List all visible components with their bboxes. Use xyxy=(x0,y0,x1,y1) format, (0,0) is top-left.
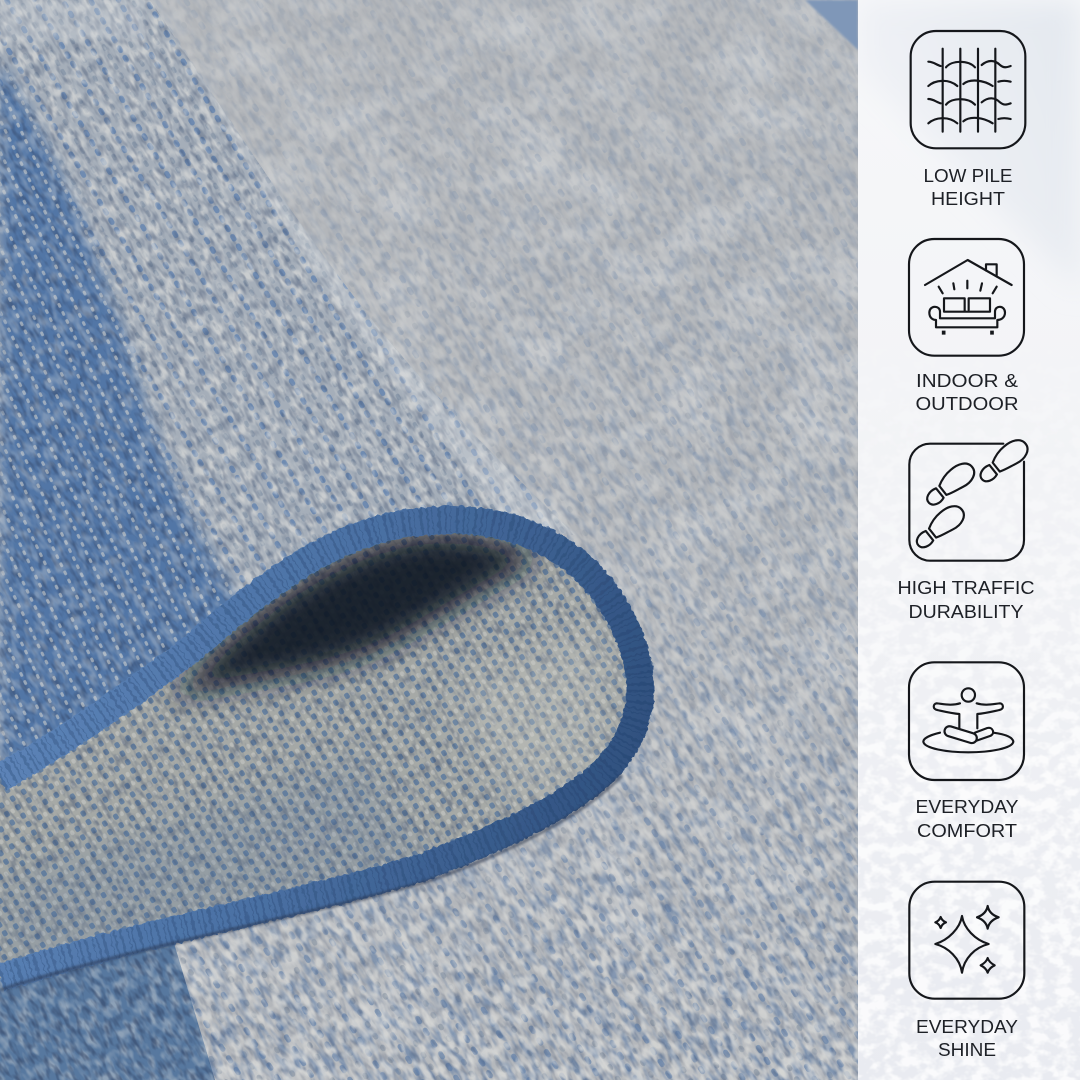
blue rug binding edge xyxy=(0,520,640,990)
icon: footprints xyxy=(909,434,1032,561)
label: everyday comfort xyxy=(916,797,1018,841)
label: high traffic durability: DURABILITY xyxy=(908,602,1024,622)
blue corner field xyxy=(0,945,215,1080)
feature: everyday shine xyxy=(909,882,1024,1060)
label: everyday comfort: COMFORT xyxy=(917,821,1017,841)
label: everyday shine: EVERYDAY xyxy=(916,1017,1018,1037)
label: high traffic durability xyxy=(898,578,1034,622)
label: low pile height xyxy=(924,166,1012,209)
icon: woven fibres xyxy=(911,31,1025,148)
underside of rug inside the roll xyxy=(0,533,627,978)
flat rug surface xyxy=(0,0,858,1080)
label: indoor and outdoor: INDOOR & xyxy=(916,371,1018,391)
label: everyday comfort: EVERYDAY xyxy=(916,797,1018,817)
feature: high traffic durability xyxy=(898,434,1034,622)
label: high traffic durability: HIGH TRAFFIC xyxy=(898,578,1034,598)
label: low pile height: HEIGHT xyxy=(931,189,1005,209)
feature: low pile height xyxy=(911,31,1025,209)
label: indoor and outdoor xyxy=(916,371,1018,414)
icon: seated person xyxy=(909,662,1024,780)
feature: indoor and outdoor xyxy=(909,239,1024,414)
icon: sparkles xyxy=(909,882,1024,999)
rolled-over rug top xyxy=(0,0,600,800)
label: everyday shine: SHINE xyxy=(938,1040,996,1060)
label: everyday shine xyxy=(916,1017,1018,1060)
feature: everyday comfort xyxy=(909,662,1024,841)
label: indoor and outdoor: OUTDOOR xyxy=(916,394,1018,414)
icon: house with sofa xyxy=(909,239,1024,356)
rug photograph background xyxy=(0,0,858,1080)
right features panel xyxy=(858,0,1080,1080)
label: low pile height: LOW PILE xyxy=(924,166,1012,186)
blue field xyxy=(0,61,242,760)
